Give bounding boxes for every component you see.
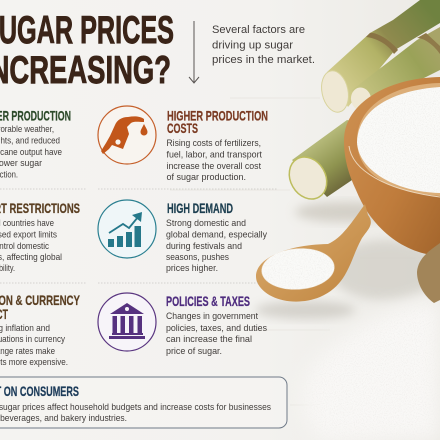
photo: sugar pile and scattered sugar <box>303 300 440 440</box>
icon: government building <box>98 293 156 351</box>
panel: lower production <box>0 108 71 180</box>
arrow: down <box>189 21 199 83</box>
panel: higher production costs: of sugar production. <box>166 171 246 182</box>
panel: policies and taxes: price of sugar. <box>166 345 222 356</box>
panel: higher production costs: COSTS <box>167 121 198 136</box>
photo: wooden spoon with sugar <box>255 204 371 319</box>
intro text <box>212 24 315 66</box>
intro text: driving up sugar <box>212 40 293 52</box>
photo: wooden bowl of sugar <box>344 77 440 256</box>
photo: burlap sack <box>417 243 440 303</box>
intro text: prices in the market. <box>212 54 315 66</box>
panel: higher production costs: increase the overall cost <box>166 160 261 171</box>
panel: higher production costs: Rising costs of fertilizers, <box>166 137 261 148</box>
panel: high demand: HIGH DEMAND <box>167 201 233 216</box>
panel: high demand: global demand, especially <box>166 228 267 240</box>
panel: higher production costs <box>98 106 268 182</box>
panel: higher production costs: fuel, labor, and transport <box>166 148 262 160</box>
panel: export restrictions <box>0 201 80 273</box>
panel: policies and taxes: POLICIES & TAXES <box>166 294 250 309</box>
icon: fuel nozzle <box>98 106 156 164</box>
photo: sugarcane stalks <box>282 0 440 206</box>
intro text: Several factors are <box>212 24 305 36</box>
panel: high demand: Strong domestic and <box>166 217 246 228</box>
panel: high demand: seasons, pushes <box>166 251 229 262</box>
panel: policies and taxes: can increase the final <box>166 333 252 344</box>
callout: impact on consumers <box>0 377 287 428</box>
panel: high demand: prices higher. <box>166 262 218 273</box>
panel: high demand: during festivals and <box>166 240 242 251</box>
panel: policies and taxes: Changes in government <box>166 310 258 321</box>
panel: higher production costs: HIGHER PRODUCTION <box>167 108 268 124</box>
title <box>0 9 174 92</box>
panel: policies and taxes <box>98 293 267 356</box>
panel: policies and taxes: policies, taxes, and duties <box>166 322 267 333</box>
panel: inflation and currency impact <box>0 293 80 367</box>
icon: rising bar chart <box>98 200 156 258</box>
panel: high demand <box>98 200 267 273</box>
